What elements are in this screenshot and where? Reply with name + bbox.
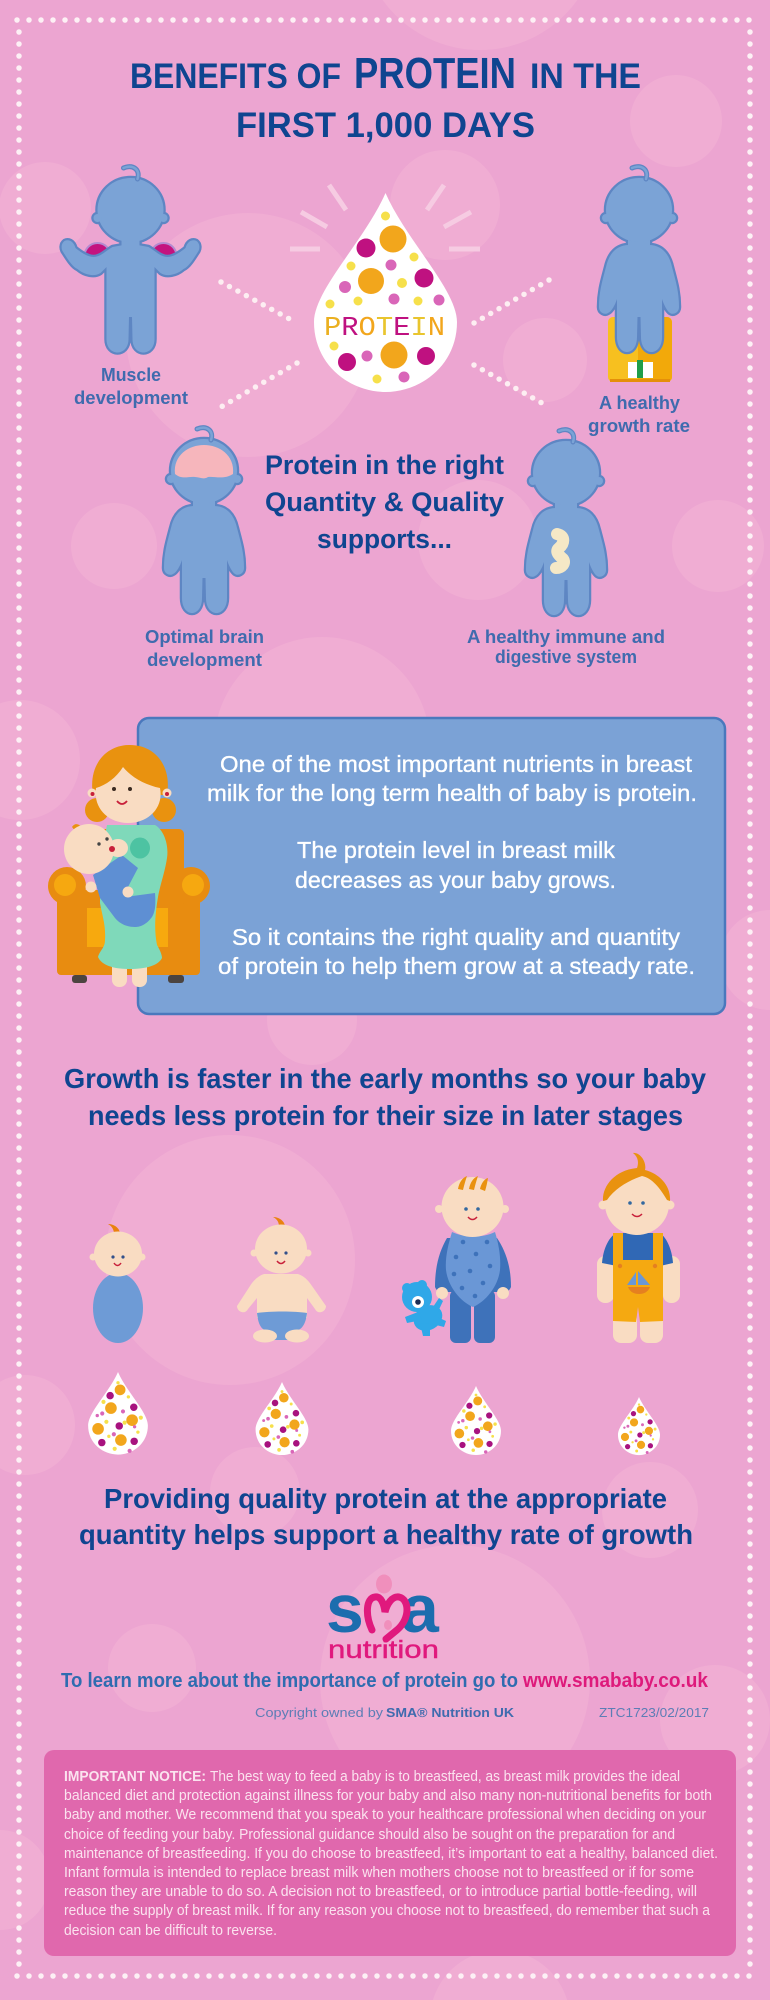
label: optimal brain development: [145, 627, 264, 670]
panel: important notice: baby and mother. We recommend that you speak to your healthcare professional when deciding on your: [64, 1807, 706, 1823]
heading: growth: [64, 1063, 706, 1131]
logo: SMA nutrition: [326, 1571, 440, 1664]
title: BENEFITS OF: [130, 57, 341, 96]
sub heading: protein in the right quantity and quality: [265, 450, 504, 554]
icon: swaddled newborn: [90, 1224, 146, 1343]
copyright line: [255, 1705, 709, 1720]
copyright line: Copyright owned by: [255, 1705, 384, 1720]
sub heading: protein in the right quantity and quality: Protein in the right: [265, 450, 504, 480]
icon: baby with gut: [526, 430, 606, 615]
title: PROTEIN: [354, 49, 516, 98]
heading: providing quality protein: Providing quality protein at the appropriate: [104, 1483, 667, 1514]
icon: protein drop, second: [256, 1382, 308, 1455]
icon: baby in nappy: [237, 1217, 326, 1342]
panel: important notice: Infant formula is intended to replace breast milk when mothers choose not to breastfeed or if for some: [64, 1865, 694, 1881]
panel: breast milk information: One of the most important nutrients in breast: [220, 751, 693, 777]
sub heading: protein in the right quantity and quality: Quantity & Quality: [265, 487, 504, 517]
logo: SMA nutrition: s: [326, 1571, 364, 1647]
title: IN THE: [530, 57, 641, 96]
label: healthy immune and digestive system: [467, 627, 665, 667]
panel: breast milk information: milk for the long term health of baby is protein.: [207, 780, 697, 806]
icon: toddler in dungarees: [597, 1153, 680, 1343]
label: muscle development: development: [74, 388, 188, 408]
label: muscle development: [74, 365, 188, 408]
panel: important notice: [44, 1750, 736, 1956]
panel: important notice: The best way to feed a baby is to breastfeed, as breast milk provides the ideal: [210, 1769, 680, 1785]
label: healthy immune and digestive system: A healthy immune and: [467, 627, 665, 647]
panel: breast milk information: of protein to help them grow at a steady rate.: [218, 953, 695, 979]
panel: important notice: balanced diet and protection against illness for your baby and also many non-nutritional benefits for both: [64, 1788, 712, 1804]
call to action with website: www.smababy.co.uk: [522, 1670, 709, 1692]
label: healthy growth rate: [588, 393, 690, 436]
sub heading: protein in the right quantity and quality: supports...: [317, 524, 452, 554]
label: optimal brain development: development: [147, 650, 262, 670]
icon: baby with brain: [164, 428, 244, 613]
panel: breast milk information: [138, 718, 725, 1014]
title: FIRST 1,000 DAYS: [236, 106, 535, 145]
icon: baby with muscles: [62, 167, 199, 352]
heading: providing quality protein: [79, 1483, 693, 1550]
label: healthy growth rate: growth rate: [588, 416, 690, 436]
panel: important notice: maintenance of breastfeeding. If you do choose to breastfeed, it’s important to eat a healthy, balanced diet.: [64, 1846, 718, 1862]
panel: important notice: decision can be difficult to reverse.: [64, 1923, 277, 1939]
illustration: mother feeding baby in armchair: [48, 745, 210, 987]
icon: baby in sleepsuit with teddy: [402, 1176, 511, 1343]
label: muscle development: Muscle: [101, 365, 161, 385]
panel: important notice: reduce the supply of breast milk. If for any reason you choose not to breastfeed, do remember that such a: [64, 1903, 711, 1919]
panel: important notice: choice of feeding your baby. Professional guidance should also be sought on the preparation for and: [64, 1827, 675, 1843]
copyright line: ZTC1723/02/2017: [599, 1705, 709, 1720]
panel: breast milk information: decreases as your baby grows.: [295, 867, 616, 893]
icon: protein drop: PROTEIN: [324, 314, 445, 344]
icon: protein drop: [314, 193, 457, 392]
icon: rays around protein drop: [290, 185, 480, 249]
call to action with website: To learn more about the importance of protein go to: [61, 1670, 518, 1692]
label: healthy growth rate: A healthy: [599, 393, 680, 413]
dotted connectors: [221, 280, 549, 407]
panel: breast milk information: The protein level in breast milk: [297, 837, 616, 863]
panel: important notice: IMPORTANT NOTICE:: [64, 1769, 206, 1785]
icon: protein drop, largest: [88, 1372, 148, 1455]
heading: growth: Growth is faster in the early months so your baby: [64, 1063, 706, 1094]
label: healthy immune and digestive system: digestive system: [495, 647, 637, 667]
panel: important notice: reason they are unable to do so. A decision not to breastfeed, or to introduce partial bottle-feeding, will: [64, 1884, 697, 1900]
panel: breast milk information: So it contains the right quality and quantity: [232, 924, 681, 950]
logo: SMA nutrition: nutrition: [328, 1636, 439, 1664]
title: [130, 49, 641, 145]
icon: protein drop, smallest: [618, 1397, 660, 1455]
logo: SMA nutrition: a: [401, 1571, 440, 1647]
icon: baby on scales: [599, 167, 679, 382]
heading: providing quality protein: quantity helps support a healthy rate of growth: [79, 1519, 693, 1550]
heading: growth: needs less protein for their size in later stages: [88, 1100, 683, 1131]
label: optimal brain development: Optimal brain: [145, 627, 264, 647]
icon: protein drop, third: [451, 1386, 501, 1455]
copyright line: SMA® Nutrition UK: [386, 1705, 515, 1720]
